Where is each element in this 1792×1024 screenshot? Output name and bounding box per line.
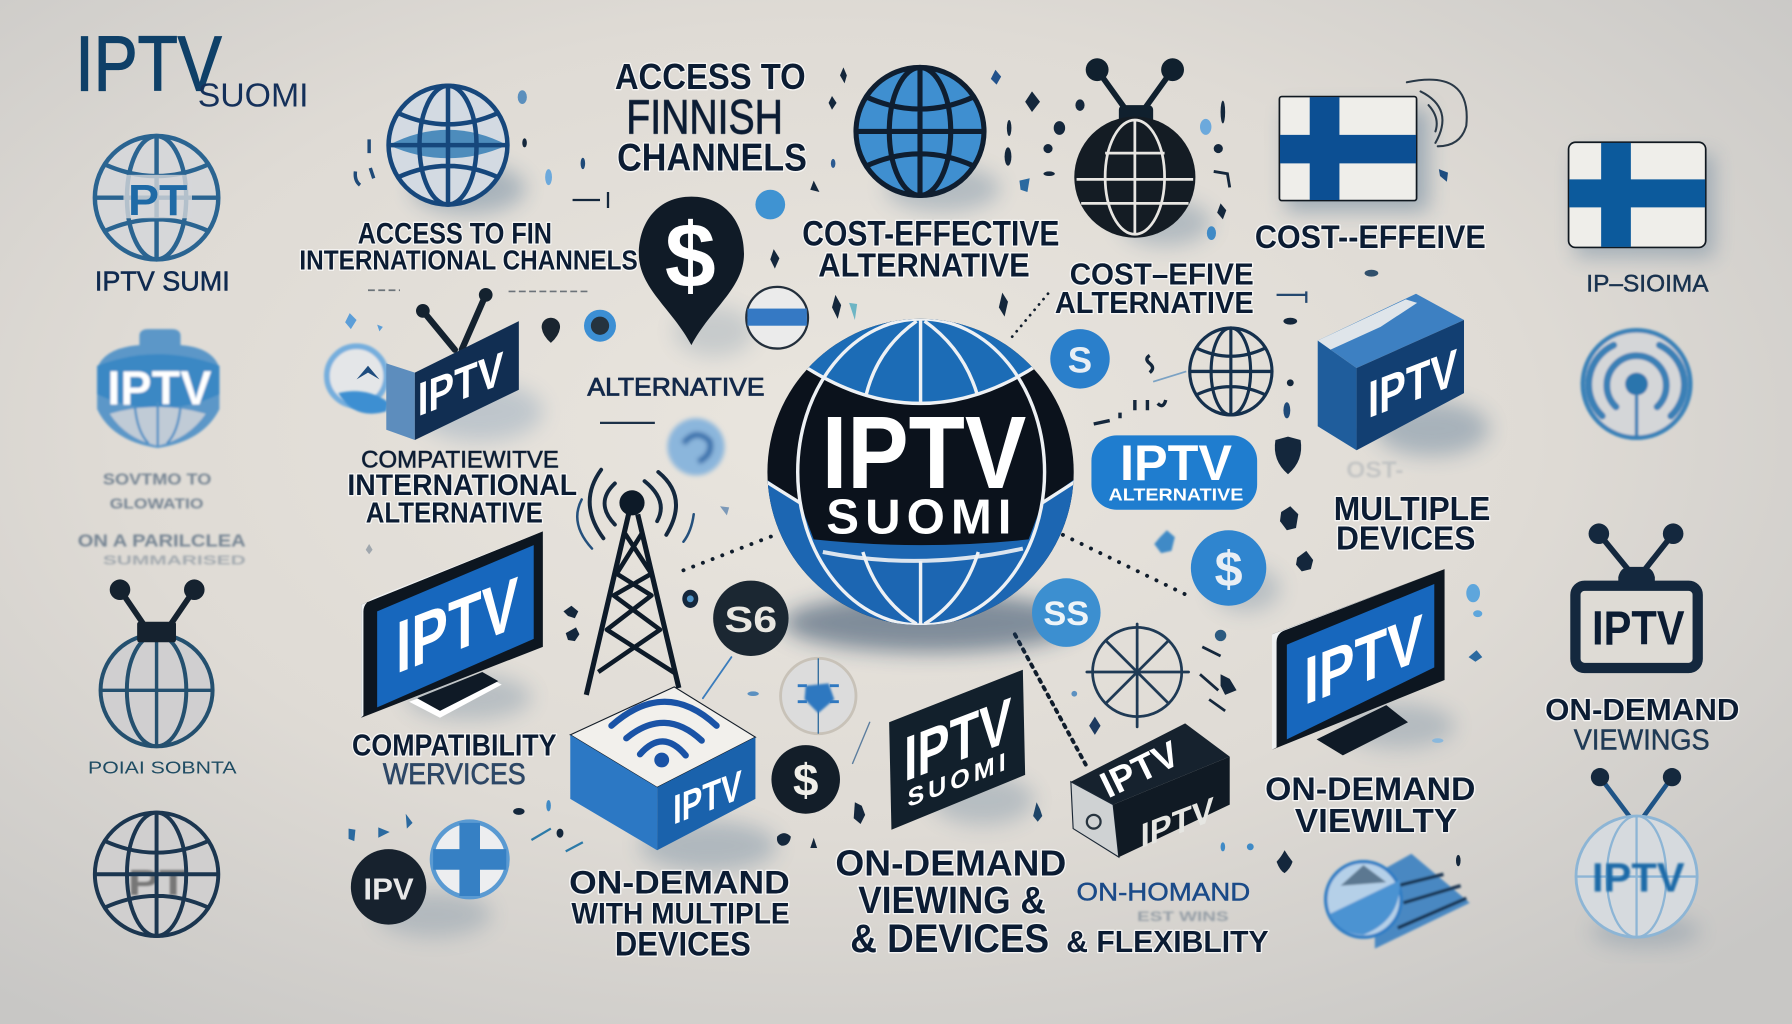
faint caption: SOVTMO TO <box>103 472 211 489</box>
icon: blue IPTV shield: IPTV <box>107 363 211 416</box>
icon: signal waves <box>577 470 694 549</box>
label: ip-sioima: IP–SIOIMA <box>1586 270 1709 297</box>
connector lines <box>683 294 1185 765</box>
icon: flag badge <box>746 287 808 349</box>
heading: cost-effective alternative <box>802 214 1059 285</box>
label: alternative: ALTERNATIVE <box>587 373 765 401</box>
icon: right finnish flag <box>1569 142 1714 257</box>
heading: access to finnish channels <box>615 56 807 179</box>
title: SUOMI <box>198 77 309 114</box>
heading: on-demand viewilty: VIEWILTY <box>1295 803 1457 840</box>
heading: on-demand flexibility <box>1066 879 1269 959</box>
badge: s6: S6 <box>725 599 777 640</box>
badge: iptv alternative: ALTERNATIVE <box>1109 485 1243 505</box>
icon: dark globe PT: PT <box>128 862 187 903</box>
heading: cost-effective alternative: COST-EFFECTIVE <box>802 214 1059 254</box>
badge: ss <box>1032 578 1101 647</box>
heading: competitive international alternative <box>347 446 577 529</box>
heading: on-demand with multiple devices: DEVICES <box>615 925 751 963</box>
badge: s6 <box>713 581 789 656</box>
icon: globe PT: PT <box>128 177 188 225</box>
heading: on-demand with multiple devices: WITH MULTIPLE <box>571 897 790 930</box>
icon: dark iptv box <box>1071 723 1230 857</box>
heading: multiple devices: DEVICES <box>1336 521 1475 558</box>
heading: competitive international alternative: ALTERNATIVE <box>366 497 543 529</box>
icon: signal arcs <box>1407 80 1467 146</box>
heading: cost-effeive: COST--EFFEIVE <box>1255 219 1486 255</box>
faint caption <box>78 472 246 568</box>
icon: right tv: IPTV <box>1592 603 1685 656</box>
icon: iptv monitor right: IPTV <box>1304 600 1423 720</box>
heading: on-demand flexibility: & FLEXIBLITY <box>1066 924 1269 959</box>
badge: iptv alternative: IPTV <box>1120 434 1232 491</box>
heading: on-demand with multiple devices: ON-DEMAND <box>569 865 790 901</box>
icon: iptv tv box <box>327 288 543 441</box>
heading: compatibility services <box>352 727 557 791</box>
icon: compass ring <box>781 658 856 734</box>
icon: wifi box <box>570 687 777 871</box>
heading: on-demand viewing and devices: & DEVICES <box>850 917 1049 961</box>
icon: finnish flag <box>1279 97 1429 211</box>
heading: on-demand viewing and devices: VIEWING & <box>858 879 1046 921</box>
heading: on-demand viewings <box>1545 692 1739 757</box>
icon: right tv <box>1575 523 1698 668</box>
faint caption: GLOWATIO <box>110 497 203 513</box>
heading: access to finnish channels: CHANNELS <box>617 136 807 179</box>
heading: on-demand viewing and devices <box>835 842 1066 961</box>
heading: on-demand viewing and devices: ON-DEMAND <box>835 842 1066 883</box>
faint label: POIAI SOBNTA <box>88 758 237 778</box>
icon: light blue antenna globe: IPTV <box>1592 854 1685 900</box>
icon: blue globe <box>856 67 1000 211</box>
badge: dollar blue <box>1191 530 1280 611</box>
heading: access to finnish channels: FINNISH <box>626 92 783 145</box>
icon: iptv suomi panel: IPTV <box>904 684 1011 795</box>
title: IPTV <box>75 21 222 107</box>
heading: on-demand flexibility: ON-HOMAND <box>1077 879 1250 907</box>
heading: on-demand viewilty: ON-DEMAND <box>1265 771 1475 807</box>
blue dot <box>755 190 785 219</box>
heading: compatibility services: WERVICES <box>383 758 526 791</box>
label: IPTV SUMI: IPTV SUMI <box>95 265 230 296</box>
heading: competitive international alternative: INTERNATIONAL <box>347 469 577 502</box>
scattered particles <box>345 67 1482 873</box>
icon: magnifier cards <box>1326 854 1470 949</box>
icon: small globe <box>1190 328 1272 415</box>
icon: globe access <box>389 86 526 214</box>
heading: multiple devices: OST- <box>1346 457 1403 483</box>
icon: antenna globe <box>101 579 213 746</box>
heading: compatibility services: COMPATIBILITY <box>352 727 557 762</box>
heading: access to fin international channels: INTERNATIONAL CHANNELS <box>299 245 638 276</box>
icon: wifi box: IPTV <box>673 761 742 834</box>
badge: dollar dark <box>771 745 840 814</box>
badge: S circle <box>1050 329 1110 389</box>
heading: on-demand with multiple devices <box>569 865 790 963</box>
icon: dark iptv box: IPTV <box>1141 789 1214 856</box>
icon: location pin <box>542 318 560 343</box>
heading: access to finnish channels: ACCESS TO <box>615 56 806 97</box>
icon: dark iptv box: IPTV <box>1094 733 1186 806</box>
central globe: IPTV <box>822 395 1026 510</box>
badges: ipv and flag <box>351 822 507 937</box>
icon: blue blob <box>667 418 725 475</box>
central globe <box>754 309 1086 653</box>
faint caption: ON A PARILCLEA <box>78 530 246 550</box>
icon: signal circle <box>1583 330 1690 439</box>
heading: cost-efive alternative: ALTERNATIVE <box>1055 285 1254 320</box>
heading: multiple devices <box>1334 457 1490 558</box>
badge: iptv alternative <box>1091 434 1257 510</box>
badge: S circle: S <box>1068 340 1092 381</box>
icon: iptv suomi panel: SUOMI <box>907 747 1006 813</box>
icon: iptv tv box: IPTV <box>418 342 504 427</box>
icon: dollar pin: $ <box>665 205 716 307</box>
icon: blue IPTV shield <box>97 329 219 448</box>
icon: globe PT <box>95 136 218 259</box>
heading: on-demand viewilty <box>1265 771 1475 840</box>
icon: light blue antenna globe <box>1576 768 1701 947</box>
heading: on-demand viewings: ON-DEMAND <box>1545 692 1739 727</box>
icon: iptv monitor left <box>361 531 543 720</box>
icon: compass <box>1087 624 1189 727</box>
icon: iptv monitor right <box>1272 569 1455 755</box>
heading: cost-efive alternative <box>1055 257 1254 320</box>
central globe: SUOMI <box>826 491 1011 545</box>
heading: cost-effective alternative: ALTERNATIVE <box>818 248 1030 285</box>
icon: dollar pin <box>639 197 754 357</box>
icon: blue ring dot <box>584 310 616 342</box>
icon: tower <box>586 490 679 695</box>
heading: on-demand flexibility: EST WINS <box>1137 909 1229 924</box>
icon: iptv suomi panel <box>889 670 1034 830</box>
badges: ipv and flag: IPV <box>363 871 414 906</box>
heading: competitive international alternative: COMPATIEWITVE <box>361 446 559 473</box>
title <box>75 21 309 114</box>
badge: dollar dark: $ <box>793 754 818 805</box>
icon: dark globe PT <box>95 813 218 936</box>
icon: blue iptv box <box>1318 294 1489 456</box>
badge: dollar blue: $ <box>1215 540 1243 597</box>
icon: iptv monitor left: IPTV <box>396 561 519 690</box>
badge: ss: SS <box>1043 595 1089 633</box>
heading: cost-efive alternative: COST–EFIVE <box>1070 257 1254 292</box>
icon: black antenna globe <box>1074 58 1211 246</box>
heading: access to fin international channels: ACCESS TO FIN <box>358 217 552 250</box>
icon: blue iptv box: IPTV <box>1368 339 1457 430</box>
heading: multiple devices: MULTIPLE <box>1334 491 1490 528</box>
faint caption: SUMMARISED <box>103 554 246 568</box>
heading: access to fin international channels <box>299 217 638 276</box>
heading: on-demand viewings: VIEWINGS <box>1574 725 1710 757</box>
